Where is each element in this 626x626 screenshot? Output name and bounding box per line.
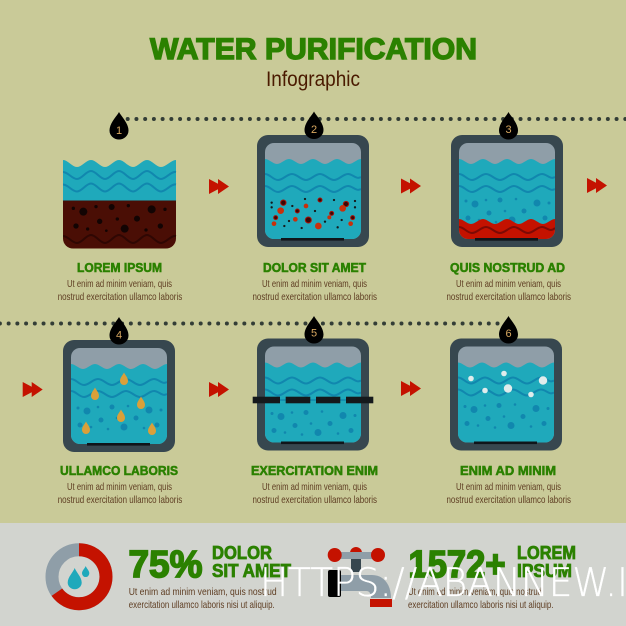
- text 4: Ut enim ad minim veniam, quis: [67, 482, 172, 493]
- step 1: sediment water basin: [63, 160, 176, 248]
- text 4: nostrud exercitation ullamco laboris: [58, 495, 182, 506]
- drop number 1: 1: [116, 125, 122, 137]
- drop number 4: [110, 317, 128, 344]
- heading 6: ENIM AD MINIM: [460, 464, 556, 478]
- text 1: Ut enim ad minim veniam, quis: [67, 279, 172, 290]
- text 6: nostrud exercitation ullamco laboris: [446, 495, 571, 506]
- subtitle: Infographic: [266, 68, 360, 91]
- stat label: [517, 543, 576, 581]
- arrow: [23, 382, 43, 397]
- text 1: nostrud exercitation ullamco laboris: [58, 292, 182, 303]
- drop number 5: 5: [311, 328, 317, 340]
- icon: faucet: [328, 547, 392, 607]
- arrow: [401, 178, 421, 194]
- text 4: [58, 482, 182, 506]
- stat label: [212, 543, 291, 581]
- drop number 3: [499, 112, 518, 140]
- text 2: [252, 279, 377, 303]
- drop number 6: 6: [505, 328, 512, 340]
- step 3: tank with red sediment: [451, 135, 563, 247]
- stat label: SIT AMET: [212, 561, 291, 581]
- stat text: [129, 587, 277, 611]
- stat label: IPSUM: [517, 561, 572, 581]
- drop number 6: [499, 316, 518, 344]
- stat text: Ut enim ad minim veniam, quis nostrud: [129, 587, 277, 598]
- text 6: Ut enim ad minim veniam, quis: [456, 482, 561, 493]
- stat text: [408, 587, 554, 611]
- text 1: [58, 279, 182, 303]
- text 5: Ut enim ad minim veniam, quis: [262, 482, 367, 493]
- arrow: [209, 382, 229, 397]
- text 5: nostrud exercitation ullamco laboris: [252, 495, 377, 506]
- drop number 2: [304, 112, 324, 139]
- step 2: tank with contaminants: [257, 135, 369, 247]
- title: WATER PURIFICATION: [150, 33, 477, 66]
- step 5: tank with filter: [253, 338, 373, 450]
- step 4: tank with oil drops: [63, 340, 175, 452]
- arrow: [401, 381, 421, 396]
- text 3: nostrud exercitation ullamco laboris: [446, 292, 571, 303]
- step 6: tank with clean bubbles: [450, 338, 562, 450]
- text 3: Ut enim ad minim veniam, quis: [456, 279, 561, 290]
- heading 4: ULLAMCO LABORIS: [60, 464, 178, 478]
- arrow: [587, 178, 607, 193]
- stat 75%: 75%: [128, 544, 202, 586]
- heading 2: DOLOR SIT AMET: [263, 261, 366, 275]
- text 3: [446, 279, 571, 303]
- drop number 4: 4: [116, 330, 122, 342]
- stat text: exercitation ullamco laboris nisi ut aliquip.: [408, 600, 554, 611]
- heading 1: LOREM IPSUM: [77, 261, 162, 275]
- drop number 2: 2: [311, 124, 317, 136]
- drop number 1: [110, 112, 128, 140]
- stat text: Ut enim ad minim veniam, quis nostrud: [408, 587, 542, 598]
- donut chart: [52, 550, 106, 604]
- stat label: LOREM: [517, 543, 576, 563]
- heading 5: EXERCITATION ENIM: [251, 464, 378, 478]
- stat text: exercitation ullamco laboris nisi ut aliquip.: [129, 600, 275, 611]
- heading 3: QUIS NOSTRUD AD: [450, 261, 565, 275]
- drop number 3: 3: [505, 124, 512, 136]
- text 6: [446, 482, 571, 506]
- footer panel: [0, 523, 626, 626]
- text 2: nostrud exercitation ullamco laboris: [252, 292, 377, 303]
- stat label: DOLOR: [212, 543, 272, 563]
- drop number 5: [304, 316, 324, 344]
- text 2: Ut enim ad minim veniam, quis: [262, 279, 367, 290]
- stat 1572+: 1572+: [408, 544, 506, 586]
- arrow: [209, 179, 229, 194]
- text 5: [252, 482, 377, 506]
